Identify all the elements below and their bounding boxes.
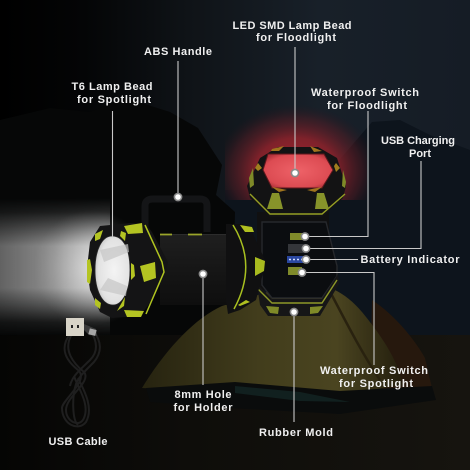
- label: LED SMD Lamp Bead for Floodlight: [232, 20, 352, 44]
- label: Waterproof Switch for Floodlight: Waterproof Switch: [311, 87, 419, 99]
- red floodlight glow: [225, 85, 367, 200]
- lens: [95, 236, 130, 305]
- label: Rubber Mold: Rubber Mold: [259, 427, 333, 439]
- label: 8mm Hole for Holder: for Holder: [174, 402, 233, 414]
- label: 8mm Hole for Holder: 8mm Hole: [174, 389, 232, 401]
- side panel buttons: [290, 233, 305, 240]
- label: USB Cable: USB Cable: [48, 436, 108, 448]
- background: tent: [142, 282, 436, 414]
- label: ABS Handle: ABS Handle: [144, 46, 212, 58]
- callout dots: [174, 169, 310, 316]
- label: LED SMD Lamp Bead for Floodlight: for Floodlight: [256, 32, 336, 44]
- label: USB Charging Port: USB Charging: [381, 135, 455, 147]
- label: Battery Indicator: Battery Indicator: [360, 254, 460, 266]
- background: pine trees: [0, 98, 235, 335]
- vertical floodlight head and body: [247, 146, 346, 316]
- callout lines: [112, 47, 421, 422]
- label: Waterproof Switch for Spotlight: [320, 365, 428, 390]
- label: T6 Lamp Bead for Spotlight: T6 Lamp Bead: [72, 81, 152, 93]
- label: USB Charging Port: Port: [409, 148, 431, 160]
- light beam: [0, 202, 120, 332]
- rear head: [226, 224, 266, 314]
- horizontal barrel: [160, 234, 240, 305]
- handle: [145, 199, 207, 232]
- flashlight: [87, 146, 346, 318]
- background: ground: [0, 335, 470, 470]
- label: USB Charging Port: [381, 135, 455, 160]
- label: 8mm Hole for Holder: [174, 389, 233, 414]
- lamp head: [87, 223, 168, 318]
- label: Waterproof Switch for Floodlight: [311, 87, 419, 112]
- label: Waterproof Switch for Floodlight: for Floodlight: [327, 100, 407, 112]
- label: Waterproof Switch for Spotlight: Waterproof Switch: [320, 365, 428, 377]
- label: LED SMD Lamp Bead for Floodlight: LED SMD Lamp Bead: [232, 20, 352, 32]
- yellow-green bumpers: [87, 223, 156, 317]
- label: T6 Lamp Bead for Spotlight: for Spotlight: [77, 94, 151, 106]
- label: T6 Lamp Bead for Spotlight: [72, 81, 152, 106]
- usb cable: [62, 318, 100, 426]
- usb plug: [66, 318, 84, 336]
- label: Waterproof Switch for Spotlight: for Spotlight: [339, 378, 413, 390]
